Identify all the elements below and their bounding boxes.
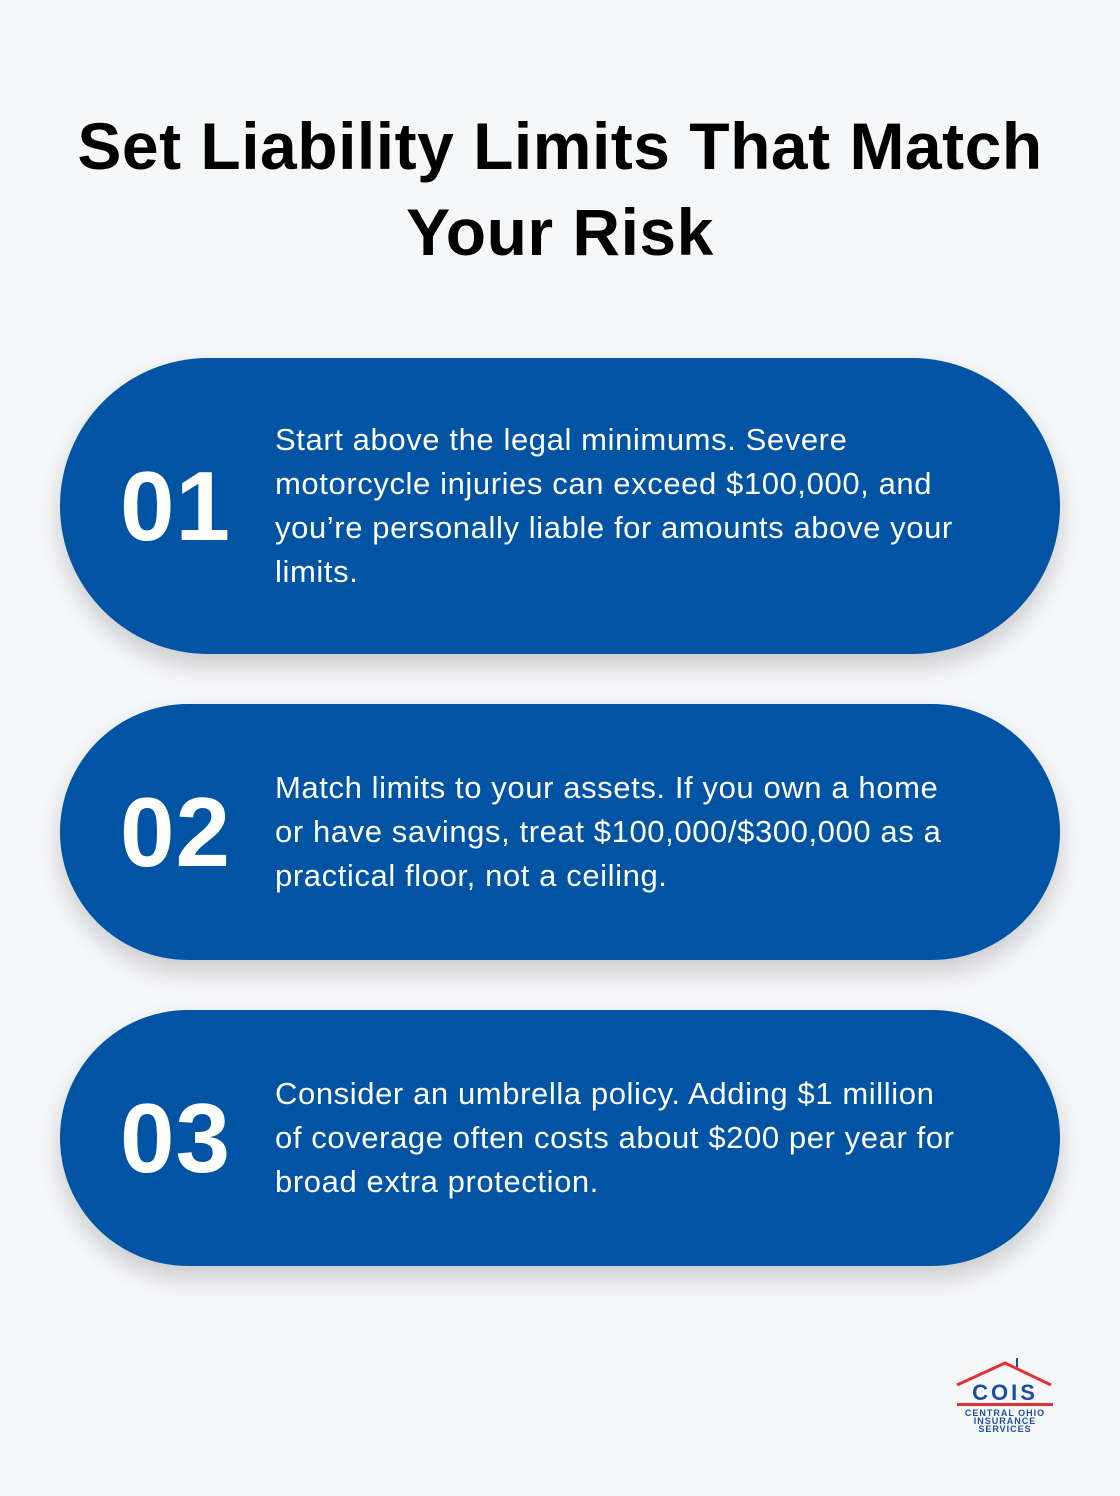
text 3 <box>275 1076 955 1199</box>
text 3: broad extra protection. <box>275 1164 599 1199</box>
text 1 <box>275 422 953 589</box>
text 3: Consider an umbrella policy. Adding $1 million <box>275 1076 934 1111</box>
text 1: Start above the legal minimums. Severe <box>275 422 847 457</box>
title: Set Liability Limits That Match <box>77 109 1043 183</box>
panel: step 2 <box>60 704 1060 960</box>
title <box>77 109 1043 269</box>
logo: COIS: INSURANCE <box>974 1416 1036 1426</box>
logo: COIS <box>956 1358 1053 1434</box>
number 03: 03 <box>120 1083 231 1193</box>
text 2: Match limits to your assets. If you own a home <box>275 770 938 805</box>
title: Your Risk <box>406 195 714 269</box>
logo: COIS: SERVICES <box>978 1424 1032 1434</box>
panel: step 1 <box>60 358 1060 654</box>
panel: step 3 <box>60 1010 1060 1266</box>
text 2: practical floor, not a ceiling. <box>275 858 668 893</box>
text 2: or have savings, treat $100,000/$300,000 as a <box>275 814 941 849</box>
number 01: 01 <box>120 451 231 561</box>
number 02: 02 <box>120 777 231 887</box>
text 1: motorcycle injuries can exceed $100,000, and <box>275 466 932 501</box>
text 1: limits. <box>275 554 358 589</box>
text 2 <box>275 770 941 893</box>
text 3: of coverage often costs about $200 per year for <box>275 1120 955 1155</box>
text 1: you’re personally liable for amounts above your <box>275 510 953 545</box>
logo: COIS: COIS <box>972 1380 1038 1405</box>
logo: COIS: CENTRAL OHIO <box>965 1408 1045 1418</box>
